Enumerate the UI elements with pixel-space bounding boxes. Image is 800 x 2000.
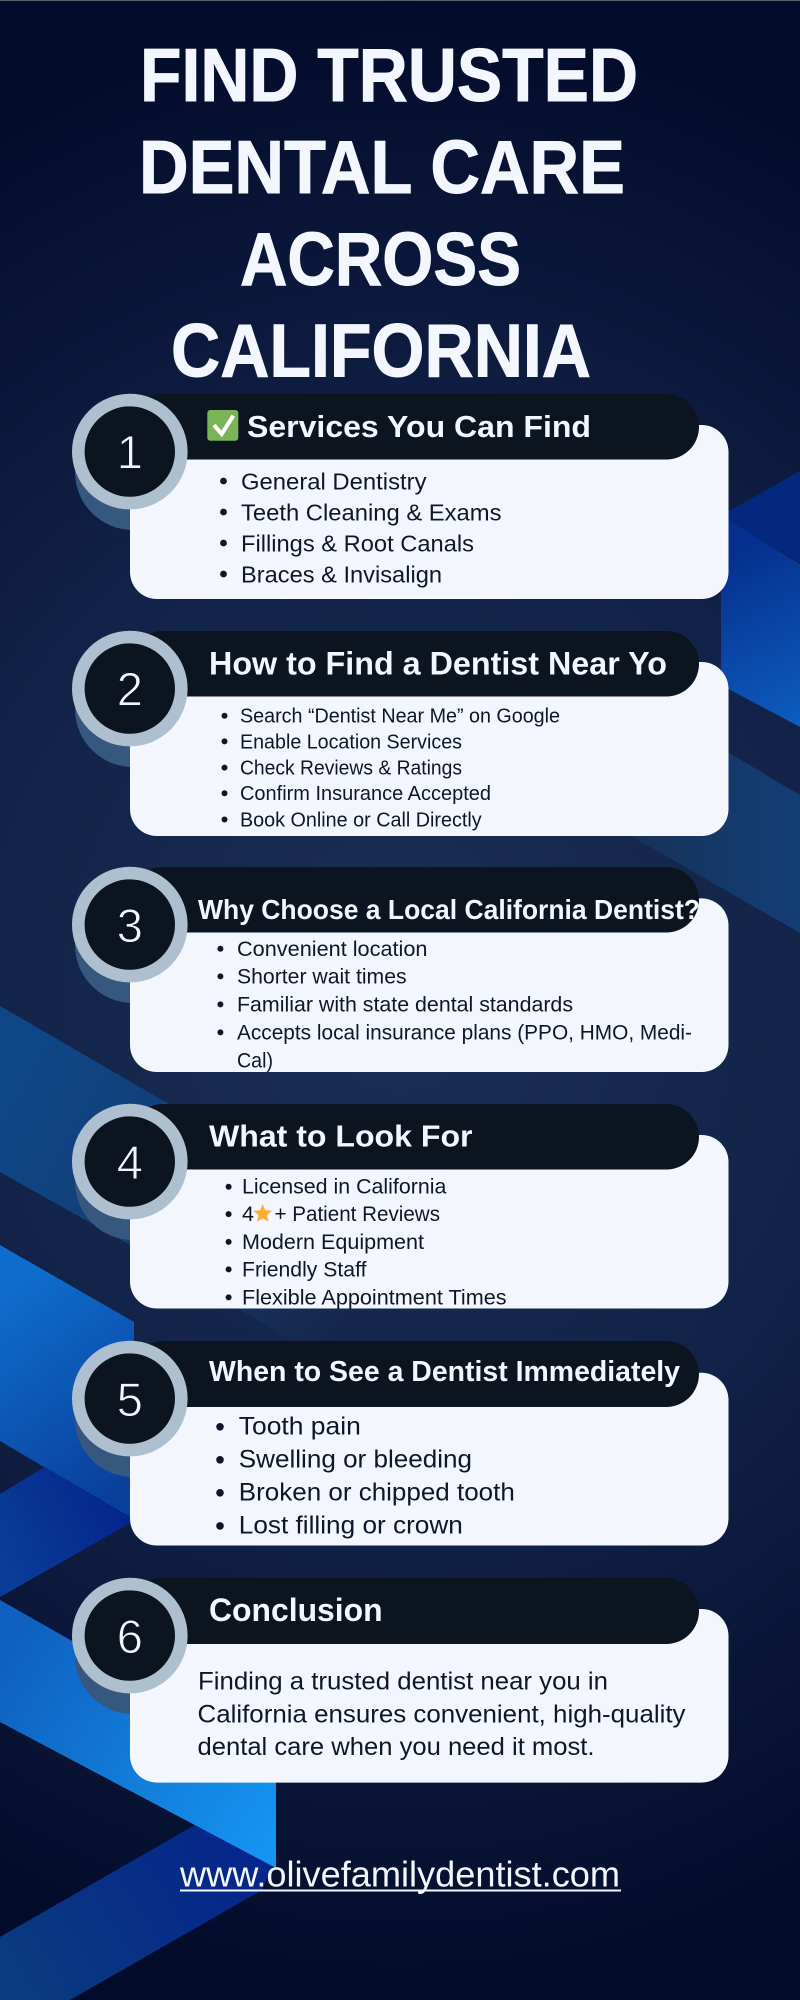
- title: FIND TRUSTED: [140, 33, 638, 117]
- card: when to see: [130, 1373, 728, 1546]
- list: when to see: Broken or chipped tooth: [239, 1478, 515, 1506]
- list: what to look for: 4: [242, 1202, 254, 1226]
- card: conclusion: [130, 1609, 728, 1783]
- panel: what to look for: [75, 1104, 728, 1309]
- list: what to look for: [226, 1175, 507, 1309]
- heading: why choose: Why Choose a Local California Dentist?: [198, 894, 700, 925]
- number badge 1: 1: [117, 426, 143, 479]
- number badge 6: 6: [117, 1610, 143, 1663]
- conclusion text: California ensures convenient, high-quality: [198, 1700, 686, 1728]
- list: why choose: Convenient location: [237, 937, 428, 961]
- list: when to see: [216, 1412, 515, 1540]
- header bar: when to see: [130, 1341, 699, 1407]
- list: why choose: Cal): [237, 1048, 273, 1072]
- number badge 3: [78, 873, 181, 976]
- list: what to look for: + Patient Reviews: [274, 1202, 440, 1226]
- heading: when to see: When to See a Dentist Immediately: [209, 1356, 680, 1388]
- list: how to find: [222, 705, 560, 831]
- title: [139, 33, 638, 392]
- footer website link: www.olivefamilydentist.com: [179, 1854, 620, 1894]
- header bar: why choose: [130, 867, 699, 932]
- panel: how to find a dentist: [75, 631, 728, 836]
- list: how to find: Book Online or Call Directly: [240, 808, 482, 831]
- card: services: [130, 425, 728, 599]
- list: services: [220, 468, 502, 588]
- card: what to look for: [130, 1135, 728, 1308]
- list: when to see: Swelling or bleeding: [239, 1445, 472, 1473]
- heading: what to look for: What to Look For: [209, 1118, 472, 1154]
- icon: green check: [207, 410, 238, 441]
- list: what to look for: Licensed in California: [242, 1175, 446, 1199]
- list: services: Teeth Cleaning & Exams: [241, 500, 502, 526]
- list: why choose: Familiar with state dental standards: [237, 992, 573, 1016]
- list: how to find: Confirm Insurance Accepted: [240, 782, 491, 805]
- panel: why choose a local dentist: [75, 867, 728, 1072]
- header bar: how to find: [130, 631, 699, 696]
- number badge 1: [78, 400, 181, 503]
- panel: services you can find: [75, 394, 728, 599]
- list: when to see: Lost filling or crown: [239, 1512, 463, 1540]
- card: why choose: [130, 898, 728, 1072]
- list: services: Fillings & Root Canals: [241, 530, 474, 556]
- number badge 5: [78, 1347, 181, 1450]
- conclusion text: [198, 1667, 686, 1761]
- list: services: Braces & Invisalign: [241, 562, 442, 588]
- list: why choose: Shorter wait times: [237, 964, 407, 988]
- list: what to look for: Modern Equipment: [242, 1230, 424, 1254]
- list: what to look for: Friendly Staff: [242, 1257, 367, 1281]
- number badge 6: [78, 1584, 181, 1687]
- list: how to find: Search “Dentist Near Me” on Google: [240, 705, 560, 728]
- number badge 4: 4: [117, 1136, 143, 1189]
- conclusion text: Finding a trusted dentist near you in: [198, 1667, 608, 1695]
- panel: when to see a dentist immediately: [75, 1341, 728, 1546]
- number badge 4: [78, 1110, 181, 1213]
- list: how to find: Check Reviews & Ratings: [240, 756, 462, 780]
- list: how to find: Enable Location Services: [240, 730, 462, 753]
- number badge 3: 3: [117, 899, 143, 952]
- header bar: what to look for: [130, 1104, 699, 1170]
- heading: conclusion: Conclusion: [209, 1592, 383, 1628]
- conclusion text: dental care when you need it most.: [198, 1733, 594, 1761]
- heading: services: Services You Can Find: [247, 409, 591, 444]
- list: when to see: Tooth pain: [239, 1412, 361, 1440]
- number badge 2: 2: [117, 663, 143, 716]
- card: how to find: [130, 662, 728, 836]
- list: why choose: Accepts local insurance plans (PPO, HMO, Medi-: [237, 1020, 692, 1044]
- number badge 2: [78, 637, 181, 740]
- number badge 5: 5: [117, 1373, 143, 1426]
- list: why choose: [217, 937, 692, 1072]
- title: ACROSS: [240, 217, 521, 301]
- heading: how to find: How to Find a Dentist Near Yo: [209, 645, 667, 681]
- list: services: General Dentistry: [241, 468, 427, 494]
- list: what to look for: Flexible Appointment Times: [242, 1285, 507, 1309]
- header bar: services: [130, 394, 699, 460]
- title: CALIFORNIA: [171, 308, 591, 392]
- title: DENTAL CARE: [139, 125, 625, 209]
- header bar: conclusion: [130, 1578, 699, 1644]
- panel: conclusion: [75, 1578, 728, 1783]
